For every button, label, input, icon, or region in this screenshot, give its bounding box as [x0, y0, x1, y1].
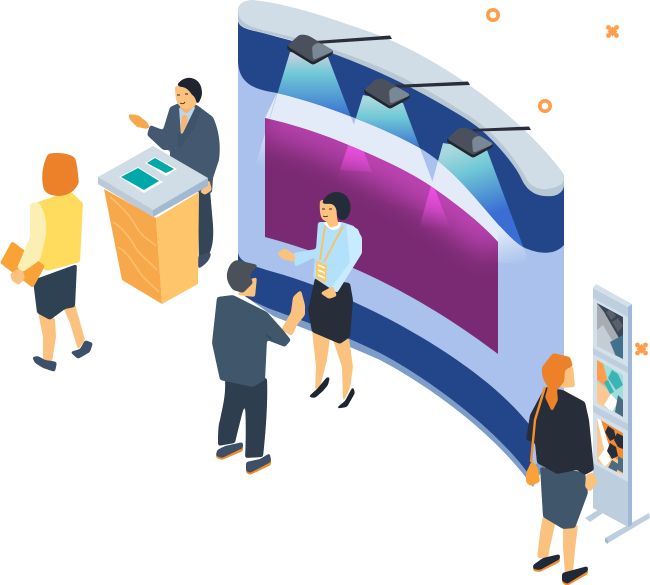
screen lighting — [265, 118, 498, 264]
presenter extended hand — [277, 248, 295, 262]
man back shoes — [216, 442, 243, 458]
upper navy band — [238, 20, 564, 253]
booth backdrop — [238, 0, 564, 487]
person: man behind podium — [128, 78, 220, 269]
poster 1 — [597, 303, 623, 359]
stand light strips — [593, 298, 628, 482]
man shoe — [198, 252, 211, 269]
man hand at side — [200, 179, 212, 195]
booth floor strip — [240, 280, 545, 487]
man eyes and mouth — [177, 94, 188, 104]
booth body — [238, 60, 564, 472]
tablet large — [119, 167, 163, 193]
presenter hair — [322, 192, 351, 220]
man shirt — [179, 106, 196, 137]
lit band — [270, 93, 498, 242]
spotlight 2 — [364, 79, 470, 109]
visitor shoe soles — [533, 557, 588, 585]
man neck — [180, 100, 196, 114]
visitor shoes — [533, 554, 560, 570]
visitor bag strap — [531, 387, 545, 462]
presenter hand at waist — [320, 286, 337, 299]
woman left leg — [38, 312, 56, 362]
decoration: orange rings and crosses — [488, 10, 648, 355]
woman hand — [10, 269, 25, 285]
visitor jacket — [526, 387, 594, 475]
woman vest — [35, 191, 83, 271]
man back hand — [281, 290, 305, 336]
man face — [175, 84, 198, 109]
presenter collar — [322, 222, 341, 230]
person: man from behind — [212, 260, 305, 475]
poster 3 — [597, 416, 624, 476]
visitor hair — [542, 353, 573, 412]
woman shoes — [32, 356, 57, 372]
spotlight 3 — [447, 126, 531, 158]
man jacket — [147, 103, 220, 193]
podium top edge — [98, 177, 208, 217]
woman hair — [42, 153, 79, 196]
lower navy band — [238, 253, 532, 472]
person: woman at stand — [526, 353, 598, 585]
presenter eyes and mouth — [322, 209, 332, 217]
booth top cap — [238, 0, 564, 189]
woman skirt — [33, 264, 77, 320]
man back jacket — [212, 295, 291, 387]
person: woman presenter — [277, 192, 362, 409]
visitor skirt — [540, 467, 588, 529]
man back trousers — [218, 378, 267, 458]
booth top cap edge — [238, 10, 564, 196]
man lapel — [177, 105, 201, 150]
man back neck and ear — [237, 277, 257, 297]
visitor legs — [537, 515, 556, 558]
screen — [265, 118, 498, 354]
spotlight 1 — [287, 35, 392, 65]
display stand — [585, 284, 650, 544]
podium left face — [104, 189, 162, 304]
navy beam glow — [278, 52, 524, 248]
man back shoe soles — [216, 445, 271, 475]
man hair — [177, 78, 202, 105]
woman sleeve — [17, 202, 46, 272]
poster 2 — [597, 358, 624, 418]
tablet small — [145, 157, 177, 176]
presenter shoes — [308, 377, 330, 398]
podium right face — [156, 192, 199, 304]
woman right leg — [62, 304, 85, 350]
visitor bag — [526, 460, 540, 486]
podium — [98, 146, 208, 304]
presenter neck and face — [320, 200, 339, 228]
person: woman with folder — [0, 153, 93, 372]
podium top — [98, 146, 208, 210]
man back hair — [227, 260, 258, 293]
man hand — [128, 114, 150, 129]
stand panel — [593, 288, 628, 527]
man tie — [180, 115, 188, 137]
presenter blouse — [293, 222, 362, 293]
presenter lanyard — [320, 226, 343, 262]
visitor hand — [585, 472, 598, 492]
presenter skirt — [308, 278, 353, 344]
beam overlap highlights — [340, 145, 372, 172]
stand feet — [585, 510, 603, 522]
presenter legs — [312, 330, 330, 391]
woman folder — [0, 241, 45, 288]
man trousers — [198, 190, 213, 268]
visitor face — [560, 366, 575, 388]
presenter badge — [316, 260, 327, 283]
